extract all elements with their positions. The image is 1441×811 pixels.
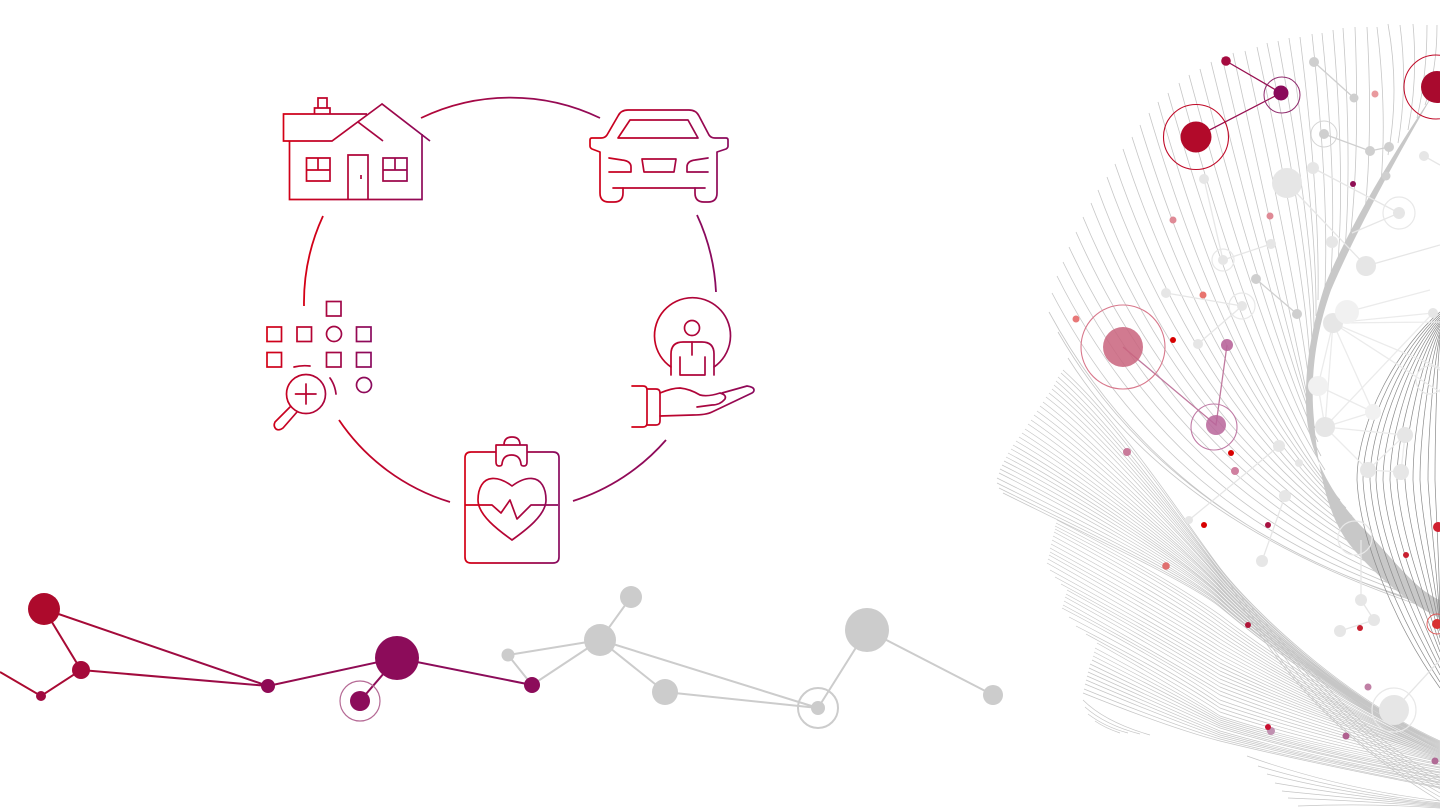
head: pink connected nodes: [1081, 305, 1237, 450]
head: crossing lines below band: [1229, 582, 1440, 801]
icon: clipboard with heart: [465, 437, 559, 563]
icon: person on hand: [632, 298, 754, 427]
head: neck lines: [1247, 756, 1440, 808]
bottom network: grey nodes: [502, 586, 1003, 728]
head: short jaw lines: [1083, 700, 1150, 735]
head: red connected nodes top: [1164, 55, 1441, 170]
head illustration: [997, 24, 1441, 808]
icon: car: [590, 110, 728, 202]
head: upper fan of lines: [1049, 24, 1440, 612]
cycle arcs: [304, 98, 716, 502]
head: inner dark arcs: [1357, 312, 1440, 688]
head: pale grey network: [1161, 57, 1441, 732]
head: thick converging band: [1306, 93, 1440, 618]
bottom network: red and purple nodes: [0, 593, 540, 721]
icon: data grid with magnifier: [267, 302, 372, 430]
icon: house: [284, 98, 430, 200]
head: small accent dots: [1072, 90, 1441, 764]
head: nose and forehead lines merging into band: [997, 370, 1440, 749]
head: lip and chin lines: [1047, 520, 1440, 788]
